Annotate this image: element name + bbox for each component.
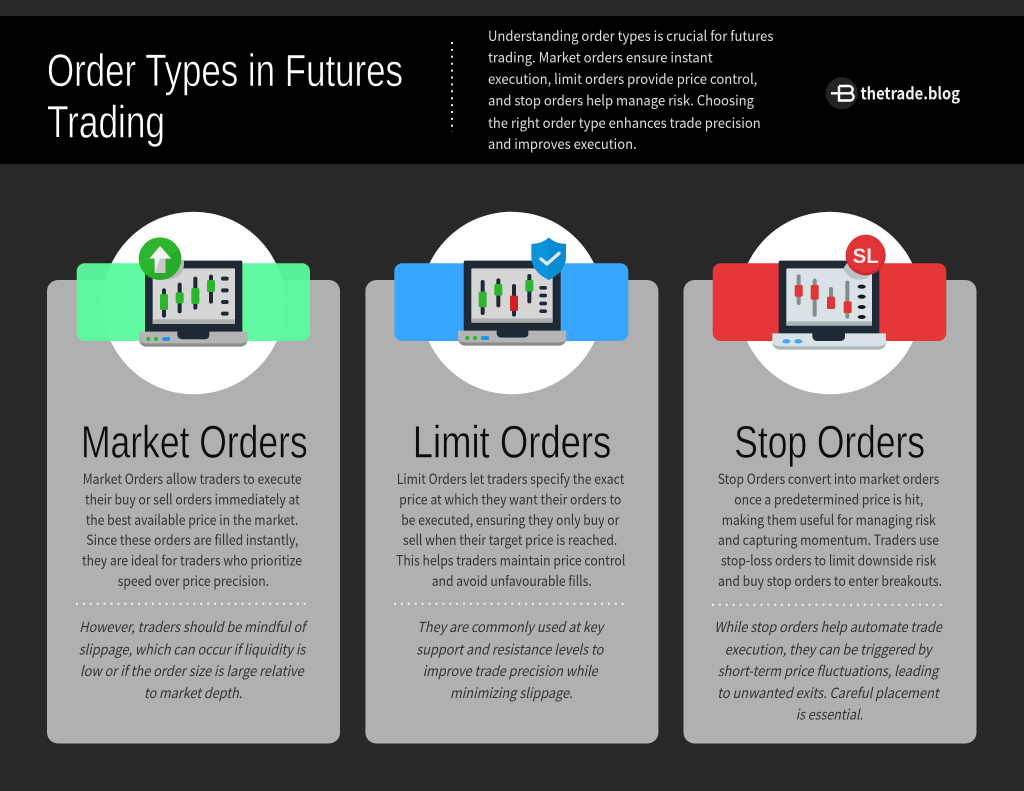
header band xyxy=(0,16,1024,164)
body text: Since these orders are filled instantly, xyxy=(86,530,298,550)
panel: stop orders xyxy=(684,212,976,743)
logo xyxy=(826,77,960,109)
italic note: low or if the order size is large relative xyxy=(80,661,305,681)
title: Order Types in Futures xyxy=(47,45,403,96)
italic note: to market depth. xyxy=(144,683,242,703)
body text xyxy=(82,469,302,591)
panel: market orders xyxy=(47,212,340,743)
icon: logo mark xyxy=(826,77,858,109)
italic note: short-term price fluctuations, leading xyxy=(718,661,940,681)
italic note: is essential. xyxy=(796,704,863,724)
body text: sell when their target price is reached. xyxy=(403,530,617,550)
body text: stop-loss orders to limit downside risk xyxy=(721,551,937,571)
italic note xyxy=(416,617,606,703)
logo: thetrade.blog xyxy=(860,80,960,104)
italic note: minimizing slippage. xyxy=(450,683,573,703)
italic note: execution, they can be triggered by xyxy=(725,639,934,659)
heading: Limit Orders xyxy=(413,417,611,468)
italic note: slippage, which can occur if liquidity is xyxy=(79,639,307,659)
body text: and buy stop orders to enter breakouts. xyxy=(718,571,942,591)
header description xyxy=(488,26,774,154)
body text: be executed, ensuring they only buy or xyxy=(401,510,620,530)
body text: This helps traders maintain price control xyxy=(396,551,625,571)
body text: making them useful for managing risk xyxy=(722,510,936,530)
body text: once a predetermined price is hit, xyxy=(734,489,923,509)
title: Trading xyxy=(47,96,165,148)
body text: Market Orders allow traders to execute xyxy=(83,469,302,489)
body text: price at which they want their orders to xyxy=(399,489,621,509)
body text: their buy or sell orders immediately at xyxy=(85,489,300,509)
header description: trading. Market orders ensure instant xyxy=(488,48,713,68)
italic note: However, traders should be mindful of xyxy=(79,617,308,637)
italic note xyxy=(79,617,308,703)
body text: Limit Orders let traders specify the exact xyxy=(397,469,625,489)
body text xyxy=(718,469,942,591)
body text: and capturing momentum. Traders use xyxy=(718,530,939,550)
body text: Stop Orders convert into market orders xyxy=(718,469,940,489)
italic note: improve trade precision while xyxy=(423,661,599,681)
header description: and stop orders help manage risk. Choosing xyxy=(488,91,754,111)
italic note: support and resistance levels to xyxy=(416,639,605,659)
icon: laptop with red candlesticks and SL badge: SL xyxy=(853,244,879,268)
heading: Market Orders xyxy=(81,417,308,468)
body text: speed over price precision. xyxy=(118,571,269,591)
header description: the right order type enhances trade precision xyxy=(488,113,761,133)
icon: laptop with green candlesticks and up arrow xyxy=(139,237,248,347)
header description: and improves execution. xyxy=(488,134,637,154)
heading: Stop Orders xyxy=(734,417,925,468)
title xyxy=(47,45,403,148)
icon: laptop with candlesticks and shield xyxy=(458,238,566,346)
italic note xyxy=(714,617,943,724)
header description: Understanding order types is crucial for futures xyxy=(488,26,774,46)
header description: execution, limit orders provide price control, xyxy=(488,69,757,89)
italic note: They are commonly used at key xyxy=(417,617,606,637)
panel: limit orders xyxy=(365,212,658,743)
body text: they are ideal for traders who prioritize xyxy=(82,551,302,571)
body text: the best available price in the market. xyxy=(86,510,298,530)
body text xyxy=(396,469,625,591)
italic note: While stop orders help automate trade xyxy=(714,617,943,637)
italic note: to unwanted exits. Careful placement xyxy=(717,683,940,703)
icon: laptop with red candlesticks and SL badge xyxy=(772,235,886,350)
body text: and avoid unfavourable fills. xyxy=(432,571,592,591)
